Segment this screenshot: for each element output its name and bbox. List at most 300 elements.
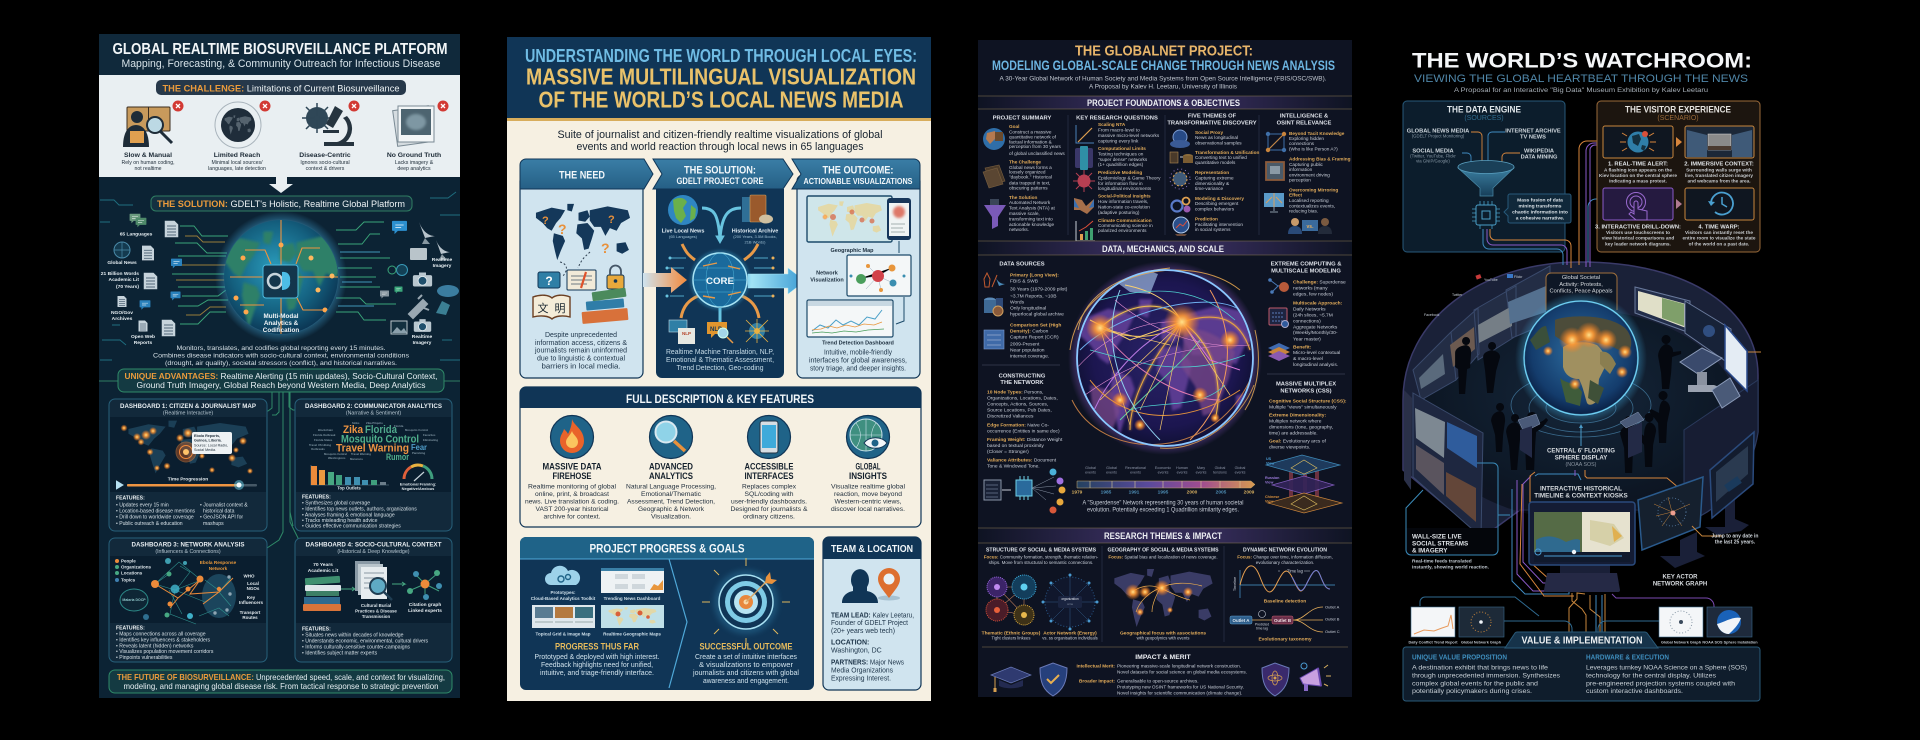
column: extreme computing: EXTREME COMPUTING & (1271, 262, 1341, 268)
dashboard 3 features: • Visualizes population movement corridors (116, 649, 214, 655)
source labels left: (70 Years) (116, 284, 139, 290)
network graph: Network (209, 566, 228, 571)
actor network: organization (1061, 597, 1079, 601)
callout: future of biosurveillance: THE FUTURE OF BIOSURVEILLANCE: Unprecedented speed, scale, and context for visualizing, (117, 673, 445, 682)
column: project summary: Goal (1009, 124, 1019, 129)
dashboard 1 features: • Journalist context & (200, 502, 248, 508)
hardware and execution: Leverages turnkey NOAA Science on a Sphere (SOS) (1586, 664, 1747, 672)
intro text (558, 129, 882, 153)
column: key research questions: polarized environments (1098, 228, 1147, 233)
screens: upper left social wall: YouTube (1484, 278, 1498, 282)
icon: documents and magnifier (355, 561, 405, 619)
data source labels: WIKIPEDIA (1524, 148, 1554, 154)
network graph: Local (247, 581, 259, 586)
solution pill heading: THE SOLUTION: GDELT's Holistic, Realtime Global Platform (157, 199, 405, 209)
outlet flow: Outlet B (1325, 616, 1340, 622)
dashboard 2 features: • Tracks misleading health advice (302, 518, 378, 524)
column: key research questions: Scaling NTA (1098, 122, 1126, 127)
multiplex layers graphic: View (1265, 500, 1273, 504)
solution description (153, 345, 409, 367)
icons: intelligence (1264, 132, 1332, 234)
screens: upper left social wall: Twitter (1452, 293, 1463, 297)
panel: the solution: GDELT PROJECT CORE (676, 176, 764, 186)
challenge labels: not realtime (134, 166, 162, 172)
column: constructing the network: occurrence (Entities in same doc) (987, 428, 1060, 434)
network graph: Key (247, 595, 256, 600)
world map with hotspots: Social Media. (194, 448, 216, 452)
outcome description (809, 350, 907, 372)
need description: information access, citizens & (535, 340, 627, 347)
callout: future of biosurveillance: modeling, and managing global disease risk. From tactical response to strategic prevention (124, 682, 439, 691)
column: intelligence and osint: connections (1289, 141, 1315, 146)
timeline 1979 to 2009: 1995 (1158, 490, 1169, 496)
icon: team lead person (842, 569, 878, 603)
feature columns: Designed for journalists & (730, 506, 808, 513)
column: key research questions: "super dense" networks (1098, 157, 1148, 162)
card 1: real-time alert: A flashing icon appears on the (1604, 168, 1672, 172)
column: intelligence and osint: Effect (1289, 192, 1302, 198)
panel: the challenge band (99, 75, 460, 177)
network graph: WHO (244, 574, 255, 578)
outcome description: interfaces for global awareness, (809, 358, 907, 364)
card 4: time warp: of the world on a past date. (1689, 242, 1749, 246)
thumbnail strip (1409, 607, 1758, 644)
panel: the need: THE NEED (559, 170, 605, 182)
card 4: time warp (1683, 188, 1756, 246)
challenge labels (121, 152, 441, 172)
feature columns: Visualization. (651, 514, 691, 520)
feature columns: Emotional/Thematic (641, 491, 702, 498)
timeline 1979 to 2009: events (1196, 470, 1207, 474)
fragmented world map: ? (608, 214, 615, 226)
column: five themes: Describing emergent (1195, 201, 1239, 206)
icon: live news globe: (65 Languages) (669, 234, 698, 239)
column: key research questions: How information travels, (1098, 199, 1148, 204)
column: extreme computing: & macro-level (1293, 356, 1323, 362)
dashboard 2 features: • Guides effective communication strategies (302, 524, 401, 530)
feature columns: Visualize realtime global (831, 484, 906, 490)
column: intelligence and osint: Overcoming Mirroring (1289, 188, 1338, 192)
panel: dynamic network evolution: DYNAMIC NETWORK EVOLUTION (1243, 548, 1327, 554)
word cloud: Panicking (412, 451, 426, 455)
world map with hotspots: Ebola Reports, (194, 434, 220, 438)
column: intelligence and osint: information (1289, 167, 1313, 172)
cluster captions: Tight clusters linkees (992, 636, 1030, 640)
panel: dashboard 3 network analysis: (Influencers & Connections) (155, 549, 221, 555)
word cloud: Washingtons (328, 456, 346, 460)
data source labels: DATA MINING (1521, 154, 1558, 160)
timeline 1979 to 2009: Mary (1197, 466, 1205, 470)
icon: location pin (878, 568, 900, 600)
card 1: real-time alert: Kiev location on the central sphere (1599, 173, 1677, 178)
screens: lower left wall (1404, 390, 1483, 537)
callout: future of biosurveillance (109, 670, 452, 693)
hardware and execution: technology for the central display. Utilizes (1586, 672, 1717, 680)
column: key research questions: Nation-state co-evolution (1098, 204, 1150, 210)
feature columns: Realtime monitoring of global (528, 484, 617, 490)
column: massive multiplex networks: dimensions (tone, geography, (1269, 424, 1333, 430)
icon: historical archive: (200 Years, 3.5M Books, (733, 234, 777, 239)
feature columns: online, print, & broadcast (535, 491, 609, 498)
data source labels: GLOBAL NEWS MEDIA (1407, 128, 1469, 134)
timeline 1979 to 2009: 2005 (1216, 490, 1227, 496)
column: five themes: Prediction (1195, 216, 1218, 222)
feature columns: FIREHOSE (552, 471, 592, 481)
data source labels: via GNIP/Google) (1416, 158, 1450, 164)
panel: structure of social media systems: ships. Move from structural to semantic connections. (989, 560, 1093, 565)
dashboard 4 features: FEATURES: (302, 626, 331, 632)
date picker monitor (1692, 352, 1761, 546)
actor network (1042, 574, 1098, 630)
progress thus far (534, 642, 660, 677)
title: understanding the world: UNDERSTANDING THE WORLD THROUGH LOCAL EYES: (525, 45, 917, 66)
icon: megaphone (1300, 663, 1331, 691)
feature columns: Natural Language Processing, (626, 484, 716, 490)
column: massive multiplex networks: Multiple "views" simultaneously (1269, 404, 1337, 410)
outlet flow: Outlet A (1233, 618, 1250, 623)
icons: language barriers: 文 (538, 301, 548, 315)
superdense caption: evolution. Potentially exceeding 1 Quadrillion similarity edges. (1087, 508, 1239, 514)
thumbnail strip: Global Network Graph (1461, 640, 1502, 644)
panel: dashboard 3 network analysis: DASHBOARD 3: NETWORK ANALYSIS (132, 542, 245, 548)
word cloud: Sinks (352, 421, 360, 425)
thumbnail strip: Daily Conflict Trend Report (1409, 640, 1458, 644)
column: massive multiplex networks: Extreme Dimensionality: (1269, 412, 1326, 418)
column: data sources: Primary (Long View): (1010, 272, 1059, 278)
impact text: Intellectual Merit: (1076, 664, 1115, 668)
icon: citation graph: Linked experts (408, 608, 442, 614)
feature columns: SQL/coding with (744, 491, 794, 498)
column: project summary: The Challenge (1009, 160, 1041, 164)
timeline 1979 to 2009: events (1158, 470, 1169, 474)
icon: document to chip to nodes (984, 468, 1066, 514)
arrow: card 3 to card 4 (1676, 199, 1682, 209)
diagram: circuit lines (100, 192, 460, 360)
challenge labels: context & drivers (306, 166, 345, 172)
column: project summary: actionable knowledge (1009, 222, 1054, 227)
card 3: interactive drill-down: view historical comparisons and (1602, 236, 1674, 240)
floor rings (1511, 373, 1651, 437)
word cloud (309, 421, 438, 463)
panel: watchroom poster (1403, 48, 1761, 701)
icon: flame (550, 416, 594, 458)
fragmented world map: ? (558, 221, 567, 237)
column: project summary: "daybook." Historical (1009, 174, 1052, 180)
card 2: immersive context: live, translated citizen imagery (1685, 173, 1753, 178)
panel: geography of social media systems: Geographical focus with associations (1120, 630, 1206, 636)
network graph: Influencers (239, 600, 263, 605)
column: five themes: News as longitudinal (1195, 135, 1238, 140)
column: extreme computing: (Weekly/Monthly/30- (1293, 330, 1338, 336)
column: massive multiplex networks: NETWORKS (CSS) (1280, 388, 1332, 394)
challenge labels: Slow & Manual (124, 152, 172, 159)
column: project summary: factual information & (1009, 140, 1053, 144)
label: wall size social streams (1406, 463, 1510, 570)
column: project summary (993, 116, 1065, 232)
data source labels: TV NEWS (1520, 134, 1546, 140)
feature columns: INSIGHTS (849, 471, 887, 481)
icons: input sources right (380, 221, 459, 346)
feature columns: VAST 200-year historical (536, 506, 609, 513)
word cloud: Fear (411, 443, 427, 452)
panel: dashboard 4 socio-cultural context (295, 538, 452, 662)
icons: intelligence: vs. (1307, 224, 1314, 230)
fragmented world map (536, 204, 630, 260)
intro text: events and world reaction through local news in 65 languages (576, 141, 864, 153)
team details: Washington, DC (831, 648, 882, 654)
word cloud: Outbreaks (311, 447, 325, 451)
heat map with arcs (1114, 569, 1213, 627)
feature columns: Western-centric views, (834, 498, 902, 506)
cluster captions (982, 630, 1098, 640)
column: data sources: Comparison Set (High (1010, 322, 1061, 328)
title: biosurveillance platform: GLOBAL REALTIME BIOSURVEILLANCE PLATFORM (112, 41, 448, 58)
network graph (120, 558, 263, 624)
screens: upper left social wall (1413, 266, 1550, 400)
icon: virus and microscope (302, 103, 354, 146)
challenge pill heading: THE CHALLENGE: Limitations of Current Biosurveillance (162, 84, 400, 94)
dashboard 1 features: mashups (203, 521, 224, 527)
outlet flow: Evolutionary taxonomy (1258, 636, 1312, 642)
icon: core sphere: CORE (706, 276, 734, 286)
timeline 1979 to 2009: Global (1215, 466, 1226, 470)
column: five themes: Representation (1195, 170, 1229, 175)
panel: the solution (643, 159, 805, 378)
column: intelligence and osint: Beyond Tacit Knowledge (1289, 131, 1345, 136)
icon: stack of books: 70 Years (313, 562, 333, 568)
central earth sphere (1515, 292, 1647, 424)
timeline 1979 to 2009: 1979 (1072, 490, 1083, 496)
column: key research questions: From macro-level to (1098, 128, 1140, 132)
timeline 1979 to 2009: 2000 (1187, 490, 1198, 496)
solution description: Combines disease indicators with socio-cultural context, environmental conditions (153, 352, 409, 360)
data source labels: (Twitter, YouTube, Flickr (1410, 154, 1456, 158)
team details: (20+ years web tech) (831, 628, 895, 635)
outlet flow: Outlet A (1325, 604, 1340, 610)
dashboard 3 features: • Reveals latent (hidden) networks (116, 644, 194, 650)
unique value proposition: A destination exhibit that brings news to life (1412, 664, 1548, 672)
icon: smartphone (748, 416, 790, 458)
column: constructing the network: Valiance Attributes: Document (987, 458, 1057, 464)
prototypes thumbnails: Realtime Geographic Maps (603, 632, 661, 636)
kiosk small right (1680, 348, 1740, 408)
icon: processor chip (1472, 201, 1500, 229)
label: wall size social streams: & IMAGERY (1412, 548, 1448, 554)
column: constructing the network: (Closer = Stronger) (987, 449, 1029, 455)
icons: extreme computing (1268, 278, 1290, 361)
impact text: Generalisable to open-source archives. (1117, 678, 1199, 684)
column: data sources (999, 262, 1068, 360)
prototypes thumbnails: Trending News Dashboard (604, 596, 661, 601)
panel: the outcome: THE OUTCOME: (822, 164, 894, 176)
data source labels: (GDELT Project Monitoring) (1412, 134, 1465, 138)
world map with hotspots (120, 421, 253, 474)
title: the world's watchroom (1412, 48, 1752, 94)
funnel inflow arrows (1462, 132, 1520, 166)
panel: dashboard 3 network analysis (109, 538, 267, 662)
multiplex layers graphic (1265, 455, 1342, 513)
column: intelligence and osint: contextualizes events, (1289, 204, 1335, 208)
feature columns: Geographic & Network (638, 506, 705, 513)
panel: structure of social media systems (982, 548, 1099, 640)
feature columns: INTERFACES (744, 471, 794, 481)
column: extreme computing: Benefit: (1293, 344, 1312, 350)
column: massive multiplex networks (1269, 382, 1347, 450)
timeline 1979 to 2009: events (1085, 470, 1096, 474)
progress thus far: PROGRESS THUS FAR (555, 642, 639, 652)
successful outcome (692, 642, 799, 685)
data source labels: INTERNET ARCHIVE (1505, 128, 1561, 134)
title: globalnet project (992, 42, 1335, 90)
column: five themes: Social Proxy (1195, 130, 1224, 135)
section heading: data mechanics (978, 241, 1352, 255)
card 1: real-time alert: 1. REAL-TIME ALERT: (1608, 162, 1668, 168)
source labels right: Imagery (413, 340, 432, 346)
source labels left (101, 232, 155, 346)
column: project summary: massive scale, (1009, 211, 1040, 216)
solution description: Emotional & Thematic Assessment, (666, 357, 774, 364)
section heading: research themes (978, 528, 1352, 543)
dashboard 1 features: • GeoJSON API for (200, 514, 243, 520)
source labels left: Reports (134, 340, 153, 346)
data source labels: SOCIAL MEDIA (1412, 148, 1454, 154)
panel: dynamic network evolution: evolutionary characterization. (1256, 560, 1314, 565)
column: intelligence and osint: perception (1289, 178, 1311, 182)
source labels left: Archives (112, 316, 133, 322)
gauge: emotional framing: Emotional Framing: (400, 482, 436, 486)
section heading: foundations: PROJECT FOUNDATIONS & OBJECTIVES (1087, 98, 1240, 108)
column: five themes: Transformation & Unification (1195, 150, 1259, 155)
column: constructing the network: Tone & Windowed Tone. (987, 464, 1040, 470)
timeline 1979 to 2009: events (1235, 470, 1246, 474)
network legend: Organizations (121, 564, 152, 570)
hero network globe (1068, 261, 1262, 455)
column: constructing the network: THE NETWORK (1000, 380, 1044, 386)
column: constructing the network: 10 Node Types: Persons, (987, 390, 1043, 396)
unique value proposition: potentially policymakers during crises. (1412, 688, 1532, 695)
callout: mass fusion: Mass fusion of data (1517, 198, 1563, 204)
challenge pill heading (156, 80, 406, 95)
icon: no ground truth photos (393, 106, 434, 146)
title: biosurveillance platform: Mapping, Forecasting, & Community Outreach for Infectious Disease (122, 58, 440, 70)
multiplex layers graphic: Russian (1265, 476, 1280, 480)
arrow: card 1 to card 2 (1676, 137, 1682, 147)
column: data sources: 30 Years (1979-2009 pilot) (1010, 286, 1068, 292)
date picker monitor: Jump to any date in (1712, 534, 1758, 540)
word cloud: Florida (365, 424, 398, 436)
timeline 1979 to 2009: Human (1176, 466, 1188, 470)
label: central sphere display: SPHERE DISPLAY (1555, 454, 1607, 462)
panel: dashboard 1 map (109, 399, 267, 531)
callout: global societal activity: Activity: Protests, (1559, 282, 1603, 288)
column: constructing the network: CONSTRUCTING (999, 374, 1046, 380)
column: key research questions: longitudinal environments (1098, 186, 1152, 191)
dashboard 2 features: • Analyses framing & emotional language (302, 512, 395, 518)
challenge labels: Lacks imagery & (395, 160, 434, 166)
column: data sources: Near population (1010, 348, 1045, 354)
need description: barriers in local media. (542, 364, 621, 370)
title: understanding the world (525, 45, 917, 112)
column: project summary: networks. (1009, 227, 1029, 232)
column: project summary: Text Analysis (NTA) at (1009, 206, 1055, 210)
team details: Founder of GDELT Project (831, 620, 908, 627)
column: key research questions: capturing every link (1098, 138, 1139, 144)
callout: mass fusion: a cohesive narrative. (1516, 216, 1565, 222)
solution description: Monitors, translates, and codifies global reporting every 15 minutes. (176, 345, 386, 352)
key actor network monitor: NETWORK GRAPH (1653, 582, 1707, 588)
callout: global societal activity (1546, 273, 1617, 310)
callout: unique advantages: UNIQUE ADVANTAGES: Realtime Alerting (15 min updates), Socio-Cultural Context, (124, 371, 438, 381)
key actor network monitor (1638, 477, 1707, 588)
impact text: Pioneering massive-scale longitudinal network construction. (1117, 664, 1241, 668)
callout: global societal activity: Global Societal (1562, 275, 1600, 281)
panel: the outcome (792, 159, 920, 378)
successful outcome: awareness and engagement. (703, 678, 789, 685)
card 1: real-time alert: indicating a mass protest. (1609, 178, 1667, 184)
challenge labels: languages, late detection (208, 166, 266, 172)
feature columns: Assessment, Trend Detection, (627, 498, 715, 506)
cluster captions: Actor Network (Energy) (1043, 630, 1097, 636)
icon: funnel (1458, 160, 1514, 196)
column: intelligence and osint: Addressing Bias & Framing (1289, 156, 1351, 162)
card 2: immersive context: Surrounding walls surge with (1686, 168, 1752, 172)
word cloud: Mosquito Control (341, 434, 419, 446)
word cloud: Florida (394, 424, 404, 428)
team details: PARTNERS: Major News (831, 660, 904, 666)
timeline 1979 to 2009: 1991 (1129, 490, 1140, 496)
column: extreme computing: longitudinal analysis. (1293, 362, 1338, 368)
column: intelligence and osint: INTELLIGENCE & (1280, 114, 1328, 120)
team details: Expressing Interest. (831, 676, 891, 682)
callout: mass fusion: mining transforms (1519, 204, 1562, 210)
column: massive multiplex networks: Cognitive Social Structure (CSS): (1269, 398, 1347, 404)
label: central sphere display: CENTRAL 6' FLOATING (1547, 448, 1615, 454)
bar chart: top outlets: Top Outlets (337, 486, 361, 490)
icon: magnifier (650, 416, 692, 458)
need description: journalists remain uninformed (534, 348, 627, 354)
trend detection screen (807, 300, 894, 346)
dashboard 1 features: • Updates every 15 min (116, 502, 169, 508)
network visualization screen: Network (816, 270, 839, 276)
column: project summary: Automated Network (1009, 200, 1051, 205)
cluster captions: Thematic (Ethnic Groups) (982, 630, 1041, 636)
globe caption (263, 313, 299, 334)
icon: shield check (1040, 663, 1067, 696)
feature columns: archive for context. (544, 514, 601, 520)
panel: value and implementation: VALUE & IMPLEMENTATION (1522, 636, 1642, 646)
panel: dashboard 2 communicator analytics: (Narrative & Sentiment) (346, 410, 401, 416)
panel: the solution: THE SOLUTION: (684, 164, 756, 176)
icons: language barriers: 明 (554, 302, 566, 315)
dashboard 3 features: • Identifies key influencers & stakeholders (116, 638, 211, 644)
column: key research questions: Predictive Modeling (1098, 170, 1142, 175)
section heading: data mechanics: DATA, MECHANICS, AND SCALE (1102, 244, 1224, 254)
column: extreme computing: Aggregate Networks (1293, 324, 1338, 330)
column: project summary: perception from 30 years (1009, 144, 1062, 149)
word cloud: Favorites (423, 433, 436, 437)
prototypes thumbnails: Topical Grid & Image Map (536, 632, 591, 636)
feature columns: user-friendly dashboards. (731, 498, 807, 506)
title: biosurveillance platform (112, 41, 448, 70)
wave chart: Time lag (1287, 568, 1304, 574)
panel: dashboard 1 map: DASHBOARD 1: CITIZEN & JOURNALIST MAP (120, 403, 257, 410)
kiosk heading: INTERACTIVE HISTORICAL (1540, 486, 1622, 492)
network legend: Locations (121, 570, 143, 576)
card 4: time warp: 4. TIME WARP: (1698, 224, 1740, 230)
panel: globalnet poster (978, 40, 1352, 697)
visitors silhouettes (1455, 335, 1681, 473)
wave chart: Timeline (1233, 577, 1237, 591)
